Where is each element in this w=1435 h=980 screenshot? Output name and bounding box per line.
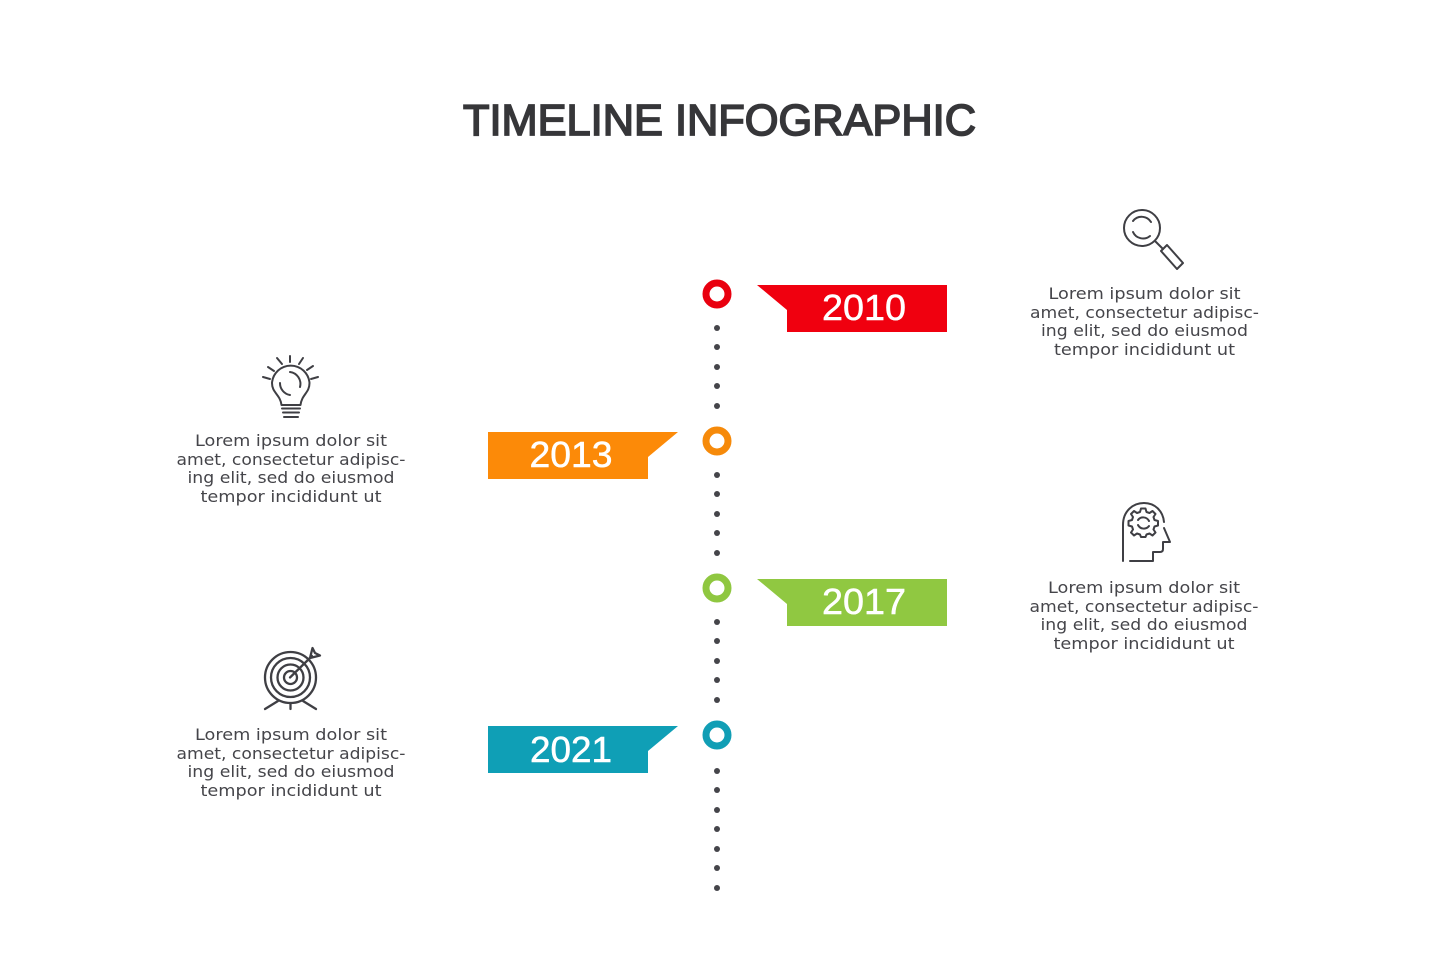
- milestone 2017: [706, 577, 947, 626]
- flag 2017: [757, 579, 947, 626]
- text block 2010: Lorem ipsum dolor sit: [1048, 284, 1240, 303]
- text block 2017: ing elit, sed do eiusmod: [1040, 615, 1248, 634]
- text block 2021: Lorem ipsum dolor sit: [195, 725, 387, 744]
- text block 2013: [176, 431, 406, 506]
- timeline marker 2021: [706, 724, 728, 746]
- timeline marker 2010: [706, 283, 728, 305]
- timeline dotted line: [714, 325, 720, 891]
- text block 2010: tempor incididunt ut: [1054, 340, 1235, 359]
- text block 2017: Lorem ipsum dolor sit: [1048, 578, 1240, 597]
- icon: light bulb: [263, 356, 318, 417]
- icon: target with arrow: [265, 648, 320, 709]
- milestone 2010: [706, 283, 947, 332]
- year 2010: 2010: [822, 287, 906, 328]
- title: TIMELINE INFOGRAPHIC: [463, 96, 976, 145]
- text block 2021: tempor incididunt ut: [200, 781, 382, 800]
- text block 2017: [1030, 578, 1258, 653]
- text block 2010: amet, consectetur adipisc-: [1030, 303, 1259, 322]
- text block 2017: tempor incididunt ut: [1054, 634, 1234, 653]
- flag 2021: [488, 726, 678, 773]
- icon: head with gear: [1123, 503, 1170, 561]
- milestone 2013: [488, 430, 728, 479]
- year 2021: 2021: [530, 729, 612, 770]
- text block 2013: amet, consectetur adipisc-: [176, 450, 406, 469]
- text block 2021: [176, 725, 406, 800]
- flag 2010: [757, 285, 947, 332]
- icon: magnifying glass: [1124, 210, 1183, 269]
- milestone 2021: [488, 724, 728, 773]
- timeline marker 2017: [706, 577, 728, 599]
- year 2017: 2017: [822, 581, 906, 622]
- text block 2010: [1030, 284, 1259, 359]
- year 2013: 2013: [530, 434, 612, 475]
- text block 2010: ing elit, sed do eiusmod: [1041, 321, 1248, 340]
- text block 2013: Lorem ipsum dolor sit: [195, 431, 387, 450]
- text block 2013: ing elit, sed do eiusmod: [188, 468, 394, 487]
- text block 2021: ing elit, sed do eiusmod: [188, 762, 394, 781]
- flag 2013: [488, 432, 678, 479]
- timeline marker 2013: [706, 430, 728, 452]
- text block 2013: tempor incididunt ut: [200, 487, 382, 506]
- text block 2021: amet, consectetur adipisc-: [176, 744, 406, 763]
- text block 2017: amet, consectetur adipisc-: [1030, 597, 1258, 616]
